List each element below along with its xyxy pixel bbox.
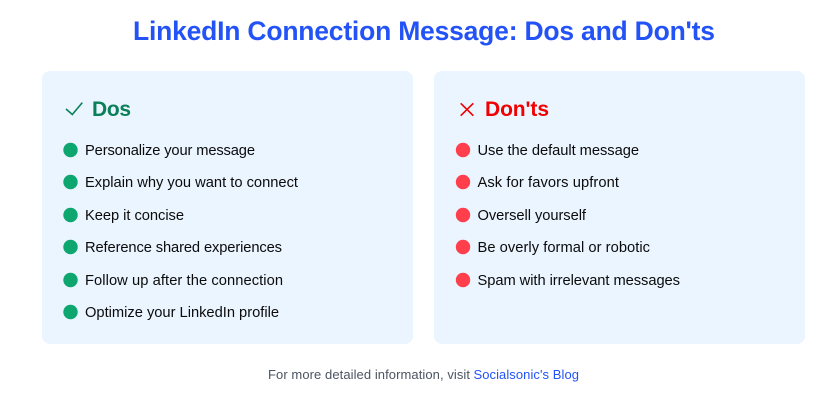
list item: spam: Spam with irrelevant messages xyxy=(478,273,680,289)
icon: check mark xyxy=(66,103,82,114)
footer note: For more detailed information, visit xyxy=(268,367,470,382)
list item: optimize profile: Optimize your LinkedIn profile xyxy=(85,305,279,321)
title: LinkedIn Connection Message: Dos and Don'ts xyxy=(133,16,715,46)
panel: don'ts xyxy=(434,71,805,344)
panel: dos xyxy=(42,71,413,344)
heading: don'ts: Don'ts xyxy=(485,98,549,121)
list item: explain: Explain why you want to connect xyxy=(85,175,298,191)
list item: default message: Use the default message xyxy=(478,143,639,159)
list item: concise: Keep it concise xyxy=(85,208,184,224)
list item: formal: Be overly formal or robotic xyxy=(478,240,650,256)
list item: follow up: Follow up after the connection xyxy=(85,273,283,289)
footer note xyxy=(268,367,579,382)
list item: oversell: Oversell yourself xyxy=(478,208,587,224)
list item: personalize: Personalize your message xyxy=(85,143,255,159)
icon: cross mark xyxy=(461,103,473,116)
list item: favors: Ask for favors upfront xyxy=(478,175,619,191)
footer link: Socialsonic's Blog xyxy=(474,367,579,382)
list item: shared experiences: Reference shared experiences xyxy=(85,240,282,256)
heading: dos: Dos xyxy=(92,98,131,121)
